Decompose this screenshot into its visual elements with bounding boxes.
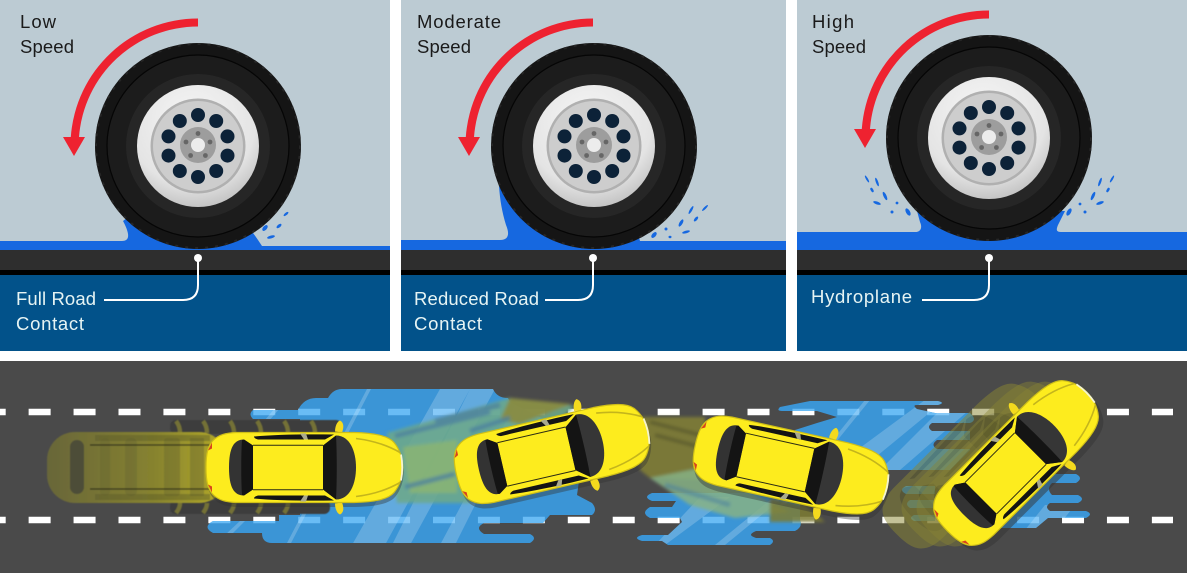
panel: moderate speed — [401, 0, 786, 351]
water layer — [0, 200, 390, 250]
icon: tire — [886, 35, 1092, 241]
heading: low speed: Speed — [20, 36, 74, 57]
callout: reduced road contact: Contact — [414, 313, 482, 334]
icon: water spray — [864, 175, 1115, 216]
callout: full road contact — [16, 254, 202, 334]
icon: tire — [95, 43, 301, 249]
panel: road with skidding car — [0, 359, 1187, 573]
car 1 — [206, 420, 404, 514]
car trail 2 — [387, 398, 575, 503]
road surface — [401, 250, 786, 270]
water layer — [797, 211, 1187, 250]
ground — [401, 275, 786, 351]
panel: high speed — [797, 0, 1187, 351]
car 3 — [685, 399, 898, 533]
callout: full road contact: Full Road — [16, 288, 96, 309]
water patches — [208, 389, 1090, 545]
heading: high speed: Speed — [812, 36, 866, 57]
callout: full road contact: Contact — [16, 313, 84, 334]
ground — [797, 275, 1187, 351]
water layer — [401, 170, 786, 250]
car trail 1 — [47, 421, 315, 513]
heading: moderate speed: Moderate — [417, 11, 501, 32]
heading: high speed: High — [812, 11, 854, 32]
icon: water spray — [650, 204, 709, 239]
road surface — [0, 250, 390, 270]
ground — [0, 275, 390, 351]
lane markings — [0, 412, 1173, 520]
car trail 4 — [872, 368, 1095, 559]
callout: reduced road contact: Reduced Road — [414, 288, 539, 309]
arrow: rotation — [458, 18, 593, 156]
car trail 3 — [640, 417, 825, 522]
arrow: rotation — [854, 10, 989, 148]
heading: low speed: Low — [20, 11, 57, 32]
icon: water spray — [252, 211, 289, 244]
callout: reduced road contact — [414, 254, 597, 334]
panel: low speed — [0, 0, 390, 351]
road surface — [797, 250, 1187, 270]
icon: tire — [491, 43, 697, 249]
car 2 — [446, 385, 659, 521]
callout: hydroplane — [811, 254, 993, 307]
car shadow bands — [170, 420, 342, 514]
arrow: rotation — [63, 18, 198, 156]
car 4 — [914, 359, 1120, 565]
heading: moderate speed: Speed — [417, 36, 471, 57]
callout: hydroplane: Hydroplane — [811, 286, 912, 307]
